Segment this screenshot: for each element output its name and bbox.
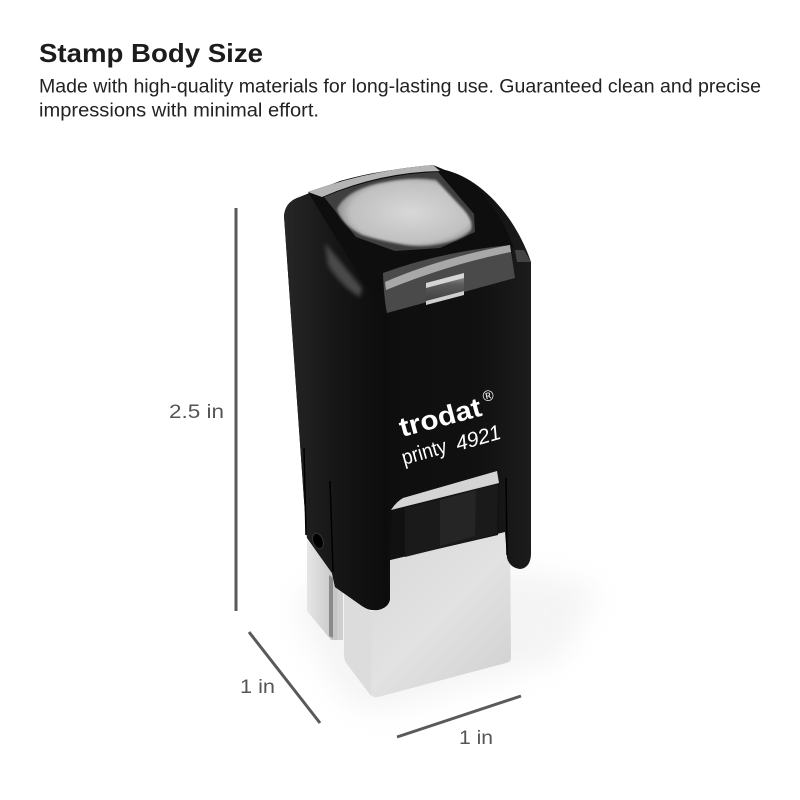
clear dome cap	[308, 165, 513, 313]
description text	[39, 76, 761, 122]
left shoulder highlight	[325, 243, 362, 297]
left silver base	[307, 540, 343, 640]
side grooves	[304, 448, 507, 572]
stamp black body	[284, 168, 531, 610]
brand logo: trodat	[396, 392, 485, 443]
clear front window	[383, 245, 515, 313]
cap glass surround	[324, 172, 475, 251]
pivot hole	[311, 532, 325, 550]
model number: 4921	[453, 421, 504, 456]
dimension label: width: 1 in	[459, 728, 493, 749]
dimension line: depth	[249, 632, 320, 723]
dimension label: height: 2.5 in	[169, 402, 224, 423]
left face of body	[284, 192, 388, 610]
front silver block	[344, 530, 511, 697]
cap rim highlight	[308, 165, 440, 197]
dimension line: width	[397, 696, 521, 737]
dimension line: height	[234, 208, 238, 611]
registered mark: ®	[481, 387, 496, 406]
ground shadow	[300, 570, 600, 712]
model name: printy	[399, 435, 450, 470]
description text: Made with high-quality materials for long-lasting use. Guaranteed clean and precise	[39, 76, 761, 98]
cap latch	[426, 274, 464, 304]
window opening	[390, 471, 499, 560]
right cap corner	[515, 250, 531, 262]
cap lens window	[337, 179, 472, 246]
description text: impressions with minimal effort.	[39, 100, 319, 122]
stamp illustration	[284, 165, 600, 712]
dimension label: depth: 1 in	[240, 677, 275, 698]
title: Stamp Body Size	[39, 38, 263, 68]
